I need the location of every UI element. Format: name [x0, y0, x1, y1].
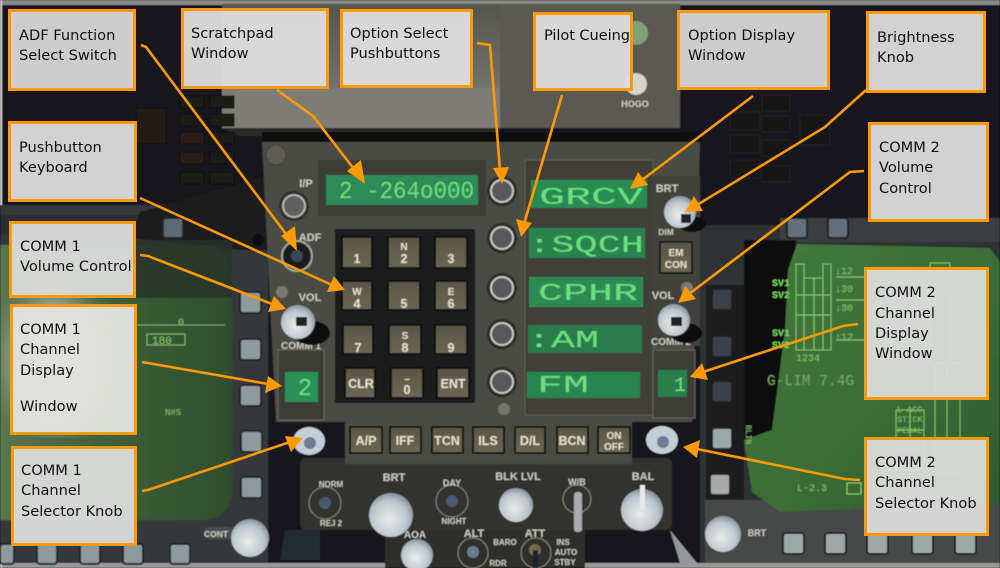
function selector button row: IFF [396, 434, 415, 448]
lower display control panel: AOA [404, 530, 426, 541]
emergency control button: EM [668, 248, 684, 259]
left MFD screen: 180 [152, 336, 172, 348]
right MFD screen: G-LIM 7.4G [767, 374, 854, 390]
right MFD screen: SV2 [772, 291, 790, 302]
up-front control panel body: VOL [652, 290, 675, 302]
lower display control panel: ATT [525, 528, 546, 540]
arrow: COMM 2 volume [678, 171, 864, 303]
callout: Pilot Cueing: Pilot Cueing [544, 27, 630, 44]
arrow: option display [630, 96, 753, 189]
function selector button row: TCN [434, 434, 460, 448]
lower display control panel: BARO [493, 538, 517, 547]
callout: COMM 2 Volume Control [870, 124, 988, 220]
callout: Brightness Knob [868, 12, 984, 92]
arrow: ADF switch [141, 45, 297, 251]
scratchpad window: 2 -264o000 [339, 179, 474, 206]
option display windows: GRCV [539, 185, 644, 212]
callout: COMM 2 Channel Display Window: Window [875, 345, 933, 362]
right MFD screen: ↓30 [835, 285, 853, 296]
up-front control panel body: COMM 2 [651, 337, 691, 348]
callout: COMM 1 Volume Control: COMM 1 [20, 238, 81, 255]
lower display control panel: NIGHT [442, 517, 467, 526]
function selector button row: ON [606, 431, 622, 442]
left upper dark grid [136, 96, 234, 184]
pushbutton keyboard: 7 [355, 341, 362, 355]
callout: Pushbutton Keyboard: Pushbutton [19, 139, 102, 156]
callout: Brightness Knob: Knob [877, 49, 914, 66]
callout: COMM 1 Channel Display Window: Display [20, 362, 74, 379]
callout: ADF Function Select Switch [10, 10, 134, 90]
option display windows: :SQCH [528, 233, 644, 260]
callout: COMM 2 Channel Display Window: Display [875, 325, 929, 342]
callout: COMM 1 Volume Control [10, 222, 134, 296]
function selector button row [345, 420, 632, 464]
right upper dark grid [730, 95, 830, 182]
up-front control panel body: VOL [299, 292, 322, 304]
callout: Option Select Pushbuttons: Option Select [350, 25, 449, 42]
right MFD screen: SV2 [772, 341, 790, 352]
callout: Scratchpad Window: Window [191, 45, 249, 62]
right brightness knob: BRT [748, 528, 767, 538]
callout: COMM 2 Channel Display Window [866, 268, 988, 398]
callout: COMM 1 Channel Selector Knob: COMM 1 [21, 462, 82, 479]
lower display control panel: DAY [443, 478, 461, 488]
pushbutton keyboard: 0 [404, 383, 411, 397]
right MFD screen: 1234 [796, 354, 820, 365]
top hood: HOGO [621, 99, 649, 109]
pushbutton keyboard: – [404, 374, 410, 385]
pushbutton keyboard [335, 229, 475, 403]
arrow: COMM 1 channel display [142, 362, 282, 393]
callout: COMM 2 Channel Selector Knob: Channel [875, 474, 935, 491]
COMM 1 and COMM 2 windows [285, 370, 687, 403]
lower display control panel: NORM [319, 480, 344, 489]
pushbutton keyboard: 4 [354, 297, 361, 311]
lower display control panel: BLK LVL [495, 471, 541, 483]
right MFD screen: ↓30 [835, 304, 853, 315]
callout: Option Display Window: Option Display [688, 27, 796, 44]
pushbutton keyboard: 2 [401, 252, 408, 266]
option display windows [527, 180, 647, 400]
lower display control panel: BAL [632, 471, 655, 483]
callout: Pushbutton Keyboard: Keyboard [19, 159, 88, 176]
lower display control panel: BRT [383, 472, 406, 484]
right MFD screen: L ACC [897, 405, 923, 415]
function selector button row: OFF [604, 442, 624, 453]
function selector button row: ILS [478, 434, 498, 448]
pushbutton keyboard: 3 [448, 252, 455, 266]
control knobs [281, 196, 706, 455]
function selector button row: A/P [356, 434, 376, 448]
callout: COMM 2 Channel Selector Knob: COMM 2 [875, 454, 936, 471]
right MFD bezel [700, 218, 1000, 563]
arrow: scratchpad [277, 90, 365, 184]
up-front control panel body: COMM 1 [281, 341, 321, 352]
lower display control panel: STBY [554, 558, 576, 567]
pushbutton keyboard: 5 [401, 297, 408, 311]
right MFD screen: STICK [897, 415, 923, 425]
lower display control panel: W/B [568, 477, 586, 487]
left MFD buttons [0, 218, 262, 564]
arrow: COMM 2 selector knob [683, 440, 860, 480]
callout: COMM 2 Channel Display Window: Channel [875, 305, 935, 322]
lower display control panel: INS [556, 538, 570, 547]
callout: COMM 1 Channel Selector Knob: Selector Knob [21, 503, 123, 520]
right MFD screen: BLIN [743, 425, 752, 444]
lower display control panel [280, 458, 697, 568]
callout: COMM 2 Volume Control: Volume [879, 159, 933, 176]
left contrast knob: CONT [204, 529, 229, 539]
callout: Brightness Knob: Brightness [877, 29, 955, 46]
up-front control panel body: BRT [656, 183, 679, 195]
option display windows: CPHR [538, 281, 638, 308]
callout: COMM 1 Channel Selector Knob [12, 448, 136, 544]
right MFD buttons [710, 218, 976, 554]
option display windows: FM [537, 373, 589, 400]
up-front control panel body: I/P [299, 178, 313, 190]
left MFD screen: 0 [178, 318, 184, 329]
up-front control panel body: DIM [658, 227, 674, 237]
right MFD screen: SV1 [772, 279, 790, 290]
left contrast knob [204, 519, 269, 557]
left MFD screen: N#S [165, 408, 181, 418]
callout: COMM 1 Volume Control: Volume Control [20, 258, 132, 275]
callout: COMM 1 Channel Display Window: Channel [20, 341, 80, 358]
callout: Scratchpad Window [182, 10, 328, 88]
callout: Scratchpad Window: Scratchpad [191, 25, 274, 42]
callout: ADF Function Select Switch: ADF Function [19, 27, 115, 44]
lower display control panel: AUTO [555, 548, 577, 557]
callout: COMM 2 Volume Control: Control [879, 180, 932, 197]
COMM 1 and COMM 2 windows: 2 [298, 376, 312, 403]
callout: COMM 1 Channel Display Window: COMM 1 [20, 321, 81, 338]
pushbutton keyboard: 8 [402, 341, 409, 355]
pushbutton keyboard: CLR [348, 377, 374, 391]
right brightness knob [705, 516, 767, 552]
emergency control button: CON [665, 260, 687, 271]
right MFD screen: L-2.3 [797, 484, 827, 495]
pushbutton keyboard: ENT [440, 377, 466, 391]
callout: ADF Function Select Switch: Select Switch [19, 47, 117, 64]
right MFD screen: ↓12 [835, 267, 853, 278]
top hood [222, 4, 680, 136]
function selector button row: BCN [558, 434, 586, 448]
right MFD screen: SV1 [772, 329, 790, 340]
pushbutton keyboard: 9 [448, 341, 455, 355]
function selector button row: D/L [520, 434, 540, 448]
pushbutton keyboard: 6 [448, 297, 455, 311]
callout: COMM 1 Channel Display Window [12, 306, 136, 434]
callout: Option Select Pushbuttons [342, 10, 472, 86]
callout: Option Display Window [678, 12, 828, 88]
pushbutton keyboard: W [352, 287, 362, 298]
pushbutton keyboard: 1 [354, 252, 361, 266]
left MFD screen [0, 240, 232, 520]
callout: Pushbutton Keyboard [10, 122, 136, 200]
callout: COMM 1 Channel Display Window: Window [20, 398, 78, 415]
up-front control panel body: ADF [299, 232, 322, 244]
callout: Pilot Cueing [534, 14, 632, 90]
emergency control button [660, 242, 692, 273]
lower display control panel: ALT [464, 528, 485, 540]
arrow: COMM 1 selector knob [142, 436, 303, 491]
arrow: COMM 1 volume [140, 255, 286, 312]
up-front control panel body [262, 132, 702, 422]
I/P button and ADF switch [279, 191, 312, 271]
pushbutton keyboard: S [402, 331, 409, 342]
COMM 1 and COMM 2 windows: 1 [674, 375, 686, 398]
callout: COMM 2 Channel Selector Knob: Selector Knob [875, 495, 977, 512]
callout: COMM 2 Channel Display Window: COMM 2 [875, 284, 936, 301]
callout: COMM 2 Volume Control: COMM 2 [879, 139, 940, 156]
callout: COMM 1 Channel Selector Knob: Channel [21, 482, 81, 499]
left MFD bezel [0, 175, 270, 563]
arrow: brightness knob [685, 90, 866, 212]
callout: COMM 2 Channel Selector Knob [866, 438, 988, 534]
callout: Option Select Pushbuttons: Pushbuttons [350, 45, 440, 62]
option display windows: :AM [527, 328, 599, 355]
option select pushbuttons [487, 176, 517, 397]
arrow: COMM 2 channel display [690, 324, 858, 380]
callout: Option Display Window: Window [688, 47, 746, 64]
arrow: option select [477, 43, 509, 184]
arrow: pilot cueing [516, 95, 562, 237]
right MFD screen [743, 240, 1000, 512]
pushbutton keyboard: E [448, 287, 455, 298]
lower display control panel: RDR [489, 559, 507, 568]
lower display control panel: REJ 2 [320, 519, 343, 528]
arrow: pushbutton keyboard [140, 198, 345, 292]
pushbutton keyboard: N [400, 242, 408, 253]
right MFD screen: ↑12 [835, 333, 853, 344]
right MFD screen: PEDAL [897, 426, 923, 436]
